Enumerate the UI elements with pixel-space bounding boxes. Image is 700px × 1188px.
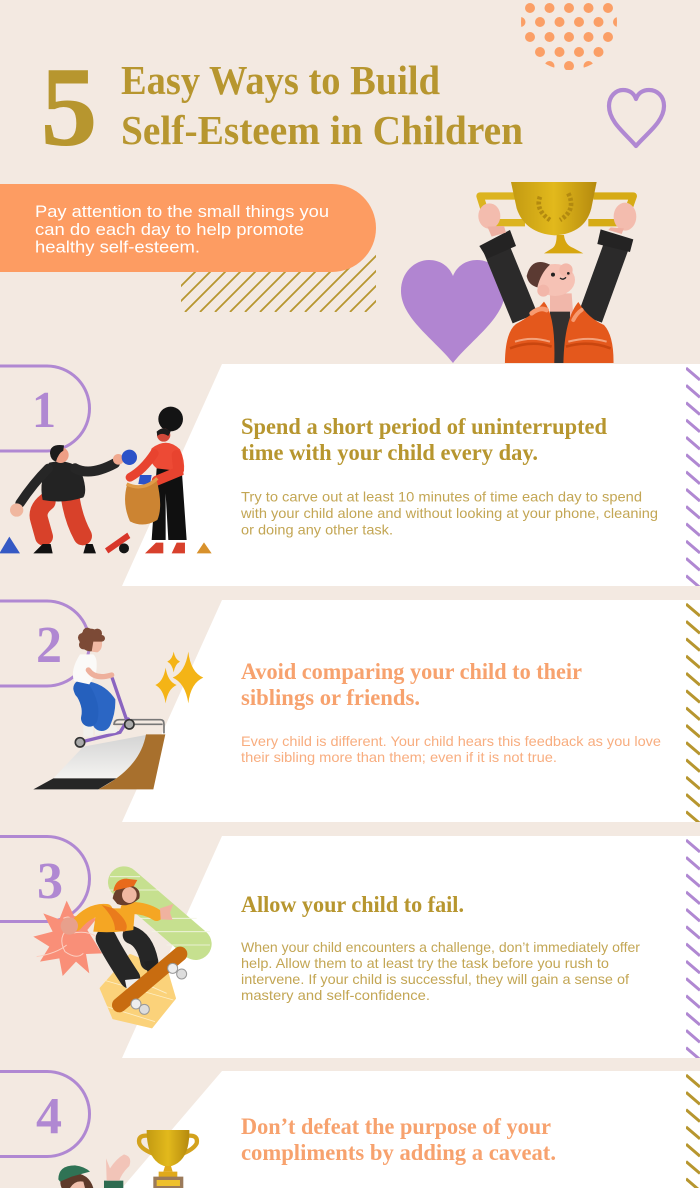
- tip 1 body: or doing any other task.: [241, 522, 393, 538]
- vest: [550, 312, 570, 368]
- illustration: child with trophy: [58, 1130, 197, 1188]
- tip 1 heading: Spend a short period of uninterrupted: [241, 414, 607, 439]
- tip 1 body: with your child alone and without looking at your phone, cleaning: [240, 506, 658, 521]
- intro banner: can do each day to help promote: [35, 221, 304, 239]
- diagonal stripes decoration: [181, 254, 376, 312]
- dotted circle decoration: [521, 3, 617, 70]
- tip 2 heading: siblings or friends.: [241, 685, 420, 710]
- ramp: [53, 735, 146, 778]
- yellow hexagon: [101, 955, 175, 1027]
- side stripes panel 1: [686, 368, 700, 588]
- side stripes panel 4: [686, 1075, 700, 1188]
- sparkles: [173, 652, 203, 703]
- skateboard: [119, 954, 180, 1005]
- woman: [152, 468, 187, 540]
- tip 4 heading: Don’t defeat the purpose of your: [241, 1114, 551, 1139]
- intro banner: Pay attention to the small things you: [35, 203, 329, 221]
- tip 1 body: Try to carve out at least 10 minutes of time each day to spend: [241, 490, 642, 504]
- tip 3 heading: Allow your child to fail.: [241, 892, 464, 917]
- tip 4 heading: [241, 1114, 556, 1165]
- sweater and arms: [76, 910, 107, 925]
- panel 1 background: [122, 364, 700, 586]
- tip 2 body: Every child is different. Your child hears this feedback as you love: [241, 734, 661, 749]
- number badge 1: 1: [32, 382, 56, 439]
- tip 2 heading: [241, 659, 582, 710]
- shoes: [125, 978, 142, 997]
- intro banner: healthy self-esteem.: [35, 238, 200, 256]
- title: [121, 57, 523, 153]
- tip 1 heading: time with your child every day.: [241, 440, 538, 465]
- trophy: [139, 1136, 157, 1155]
- handles: [480, 196, 525, 223]
- tip 1 heading: [241, 414, 607, 465]
- rail: [114, 720, 164, 733]
- number badge 4: [0, 1072, 90, 1156]
- man: [39, 502, 47, 537]
- bag: [138, 475, 152, 485]
- intro banner: [0, 184, 376, 272]
- tip 2 heading: Avoid comparing your child to their: [241, 659, 582, 684]
- green shape: [124, 882, 196, 944]
- tip 4 heading: compliments by adding a caveat.: [241, 1140, 556, 1165]
- child: [104, 1181, 123, 1188]
- number badge 2: [0, 601, 89, 686]
- number badge 3: [0, 836, 90, 922]
- tip 3 body: help. Allow them to at least try the task before you rush to: [241, 956, 609, 971]
- purple heart: [401, 260, 505, 363]
- neck and head: [550, 293, 573, 317]
- side stripes panel 2: [686, 604, 700, 824]
- tip 3 body: When your child encounters a challenge, don’t immediately offer: [241, 940, 640, 955]
- pants: [106, 938, 130, 978]
- illustration: person lifting trophy: [478, 182, 636, 370]
- tip 3 body: intervene. If your child is successful, they will gain a sense of: [241, 972, 629, 987]
- scooter: [83, 678, 128, 742]
- number badge 1: [0, 366, 90, 451]
- tip 3 body: [241, 940, 640, 1003]
- head: [113, 885, 140, 905]
- shapes: [0, 537, 20, 553]
- number badge 3: 3: [37, 853, 63, 910]
- panel 3 background: [122, 836, 700, 1058]
- illustration: children playing with balls: [0, 407, 212, 553]
- panel 2 background: [122, 600, 700, 822]
- illustration: child on skateboard: [33, 877, 210, 1027]
- arms: [495, 245, 525, 318]
- number badge 2: 2: [36, 617, 62, 674]
- hands: [478, 203, 500, 229]
- side stripes panel 3: [686, 840, 700, 1060]
- tip 1 body: [240, 490, 658, 538]
- title: Self-Esteem in Children: [121, 107, 523, 153]
- tip 2 body: [241, 734, 661, 765]
- panel 4 background: [122, 1071, 700, 1188]
- cup: [511, 182, 597, 235]
- number badge 4: 4: [36, 1088, 62, 1145]
- illustration: child on scooter and ramp: [33, 628, 203, 789]
- title number 5: 5: [41, 46, 97, 170]
- tip 3 body: mastery and self-confidence.: [241, 988, 430, 1003]
- salmon burst: [33, 901, 102, 976]
- title: Easy Ways to Build: [121, 57, 440, 103]
- child: [83, 723, 93, 737]
- tip 2 body: their sibling more than them; even if it is not true.: [241, 750, 557, 765]
- outlined heart: [609, 90, 664, 146]
